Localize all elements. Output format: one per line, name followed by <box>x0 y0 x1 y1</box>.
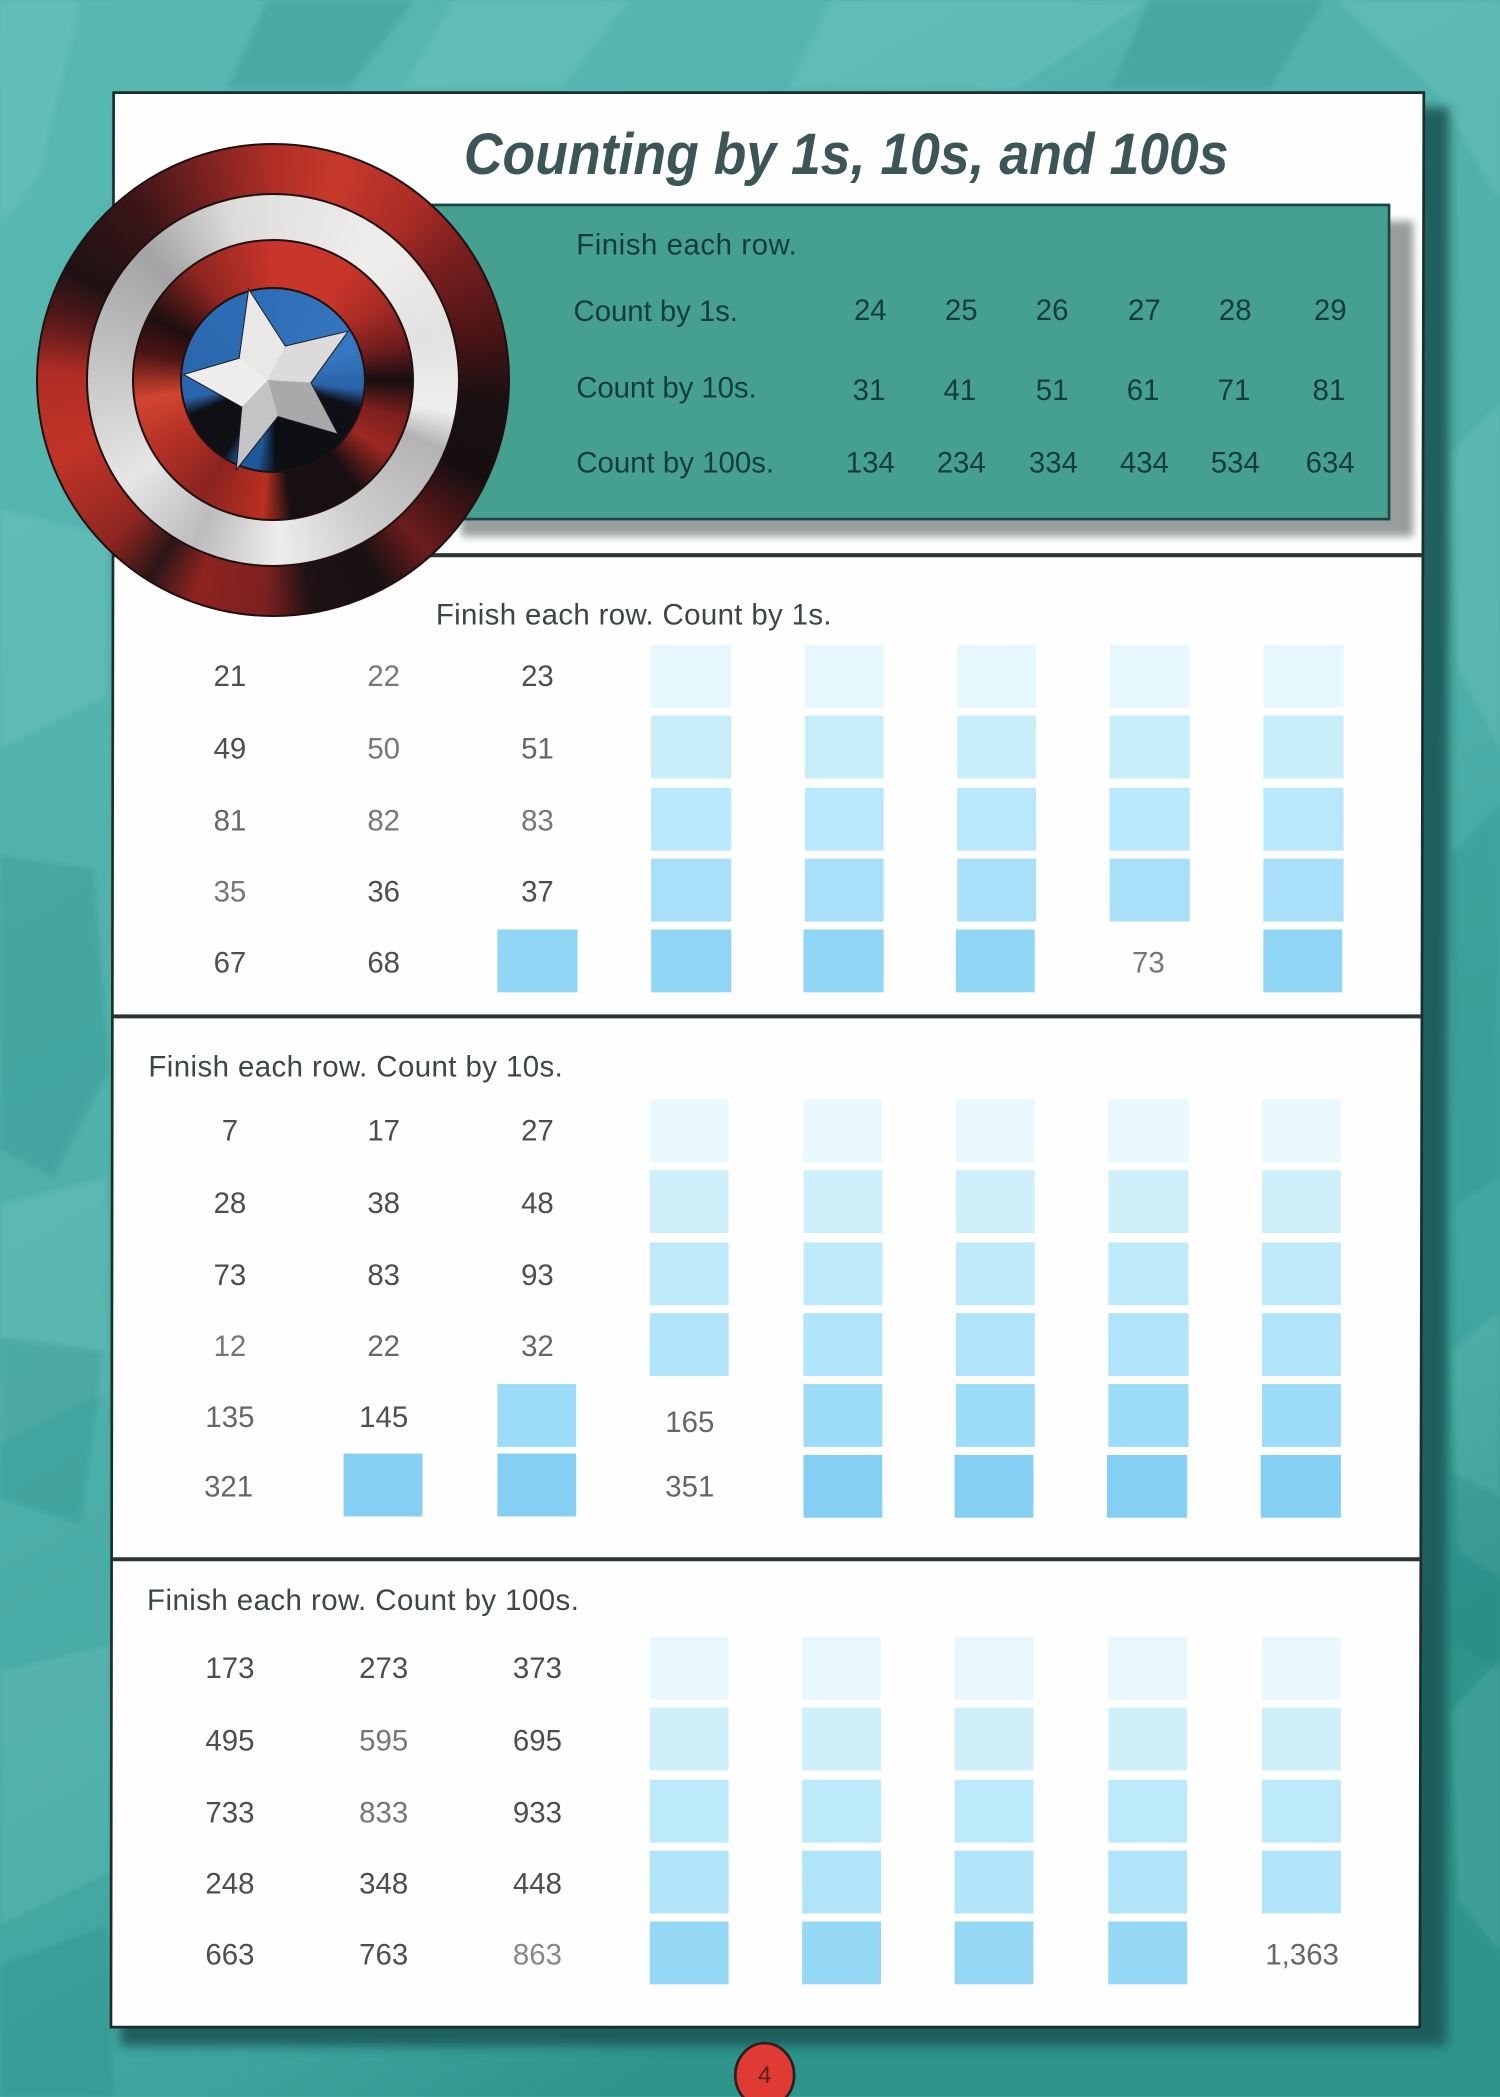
row: count by 10s: 51 <box>1036 374 1068 407</box>
example panel shadow <box>461 221 1413 536</box>
page number badge: 4 <box>758 2062 771 2089</box>
given numbers: 273 <box>359 1652 408 1685</box>
given numbers: 48 <box>521 1187 554 1220</box>
panel: worked examples <box>428 205 1389 519</box>
instruction: Finish each row. <box>576 228 797 261</box>
row: count by 10s <box>576 371 1345 407</box>
row: count by 100s: 334 <box>1029 446 1078 479</box>
row: count by 1s: Count by 1s. <box>574 295 738 328</box>
row: count by 1s: 25 <box>945 294 978 327</box>
given numbers: 145 <box>359 1401 408 1434</box>
given numbers: 7 <box>222 1115 238 1148</box>
given numbers: 82 <box>367 805 400 838</box>
row: count by 10s: 61 <box>1127 374 1159 407</box>
row: count by 100s: 234 <box>937 446 986 479</box>
given numbers: 595 <box>359 1724 408 1757</box>
given numbers: 348 <box>359 1867 408 1900</box>
given numbers: 448 <box>513 1867 562 1900</box>
given numbers: 165 <box>665 1406 714 1439</box>
page number badge <box>735 2043 794 2097</box>
row: count by 10s: 81 <box>1313 374 1345 407</box>
section: count by 1s <box>214 599 1344 992</box>
section divider lines <box>112 555 1422 1559</box>
given numbers: 27 <box>521 1115 554 1148</box>
given numbers <box>205 1652 1339 1971</box>
given numbers: 50 <box>367 732 400 765</box>
given numbers: 21 <box>214 660 246 693</box>
given numbers: 733 <box>205 1797 254 1830</box>
given numbers: 81 <box>214 805 246 838</box>
row: count by 1s: 29 <box>1314 294 1347 327</box>
row: count by 1s: 24 <box>854 294 887 327</box>
title: Counting by 1s, 10s, and 100s <box>464 122 1229 187</box>
given numbers: 22 <box>367 1330 400 1363</box>
given numbers: 933 <box>513 1797 562 1830</box>
row: count by 100s <box>576 446 1355 479</box>
given numbers: 67 <box>214 946 246 979</box>
row: count by 100s: 434 <box>1120 446 1169 479</box>
given numbers: 1,363 <box>1265 1938 1339 1971</box>
given numbers: 49 <box>214 732 246 765</box>
given numbers: 28 <box>214 1187 246 1220</box>
row: count by 100s: 634 <box>1306 446 1355 479</box>
given numbers: 38 <box>367 1187 400 1220</box>
given numbers: 22 <box>367 660 400 693</box>
given numbers: 663 <box>205 1938 254 1971</box>
given numbers: 35 <box>214 875 246 908</box>
given numbers: 23 <box>521 660 554 693</box>
given numbers: 695 <box>513 1724 562 1757</box>
given numbers: 495 <box>205 1724 254 1757</box>
given numbers: 17 <box>367 1115 400 1148</box>
row: count by 1s: 28 <box>1219 294 1252 327</box>
section: count by 10s <box>148 1051 1341 1518</box>
given numbers: 37 <box>521 875 554 908</box>
given numbers: 248 <box>205 1867 254 1900</box>
given numbers: 12 <box>214 1330 246 1363</box>
given numbers: 83 <box>367 1259 400 1292</box>
section: count by 100s <box>147 1584 1341 1984</box>
row: count by 100s: Count by 100s. <box>576 446 774 479</box>
given numbers: 51 <box>521 732 554 765</box>
given numbers: 68 <box>367 946 400 979</box>
given numbers <box>214 660 1165 979</box>
heading: Finish each row. Count by 1s. <box>436 599 832 632</box>
row: count by 100s: 134 <box>846 446 895 479</box>
heading: Finish each row. Count by 100s. <box>147 1584 579 1617</box>
given numbers: 833 <box>359 1797 408 1830</box>
given numbers: 351 <box>665 1470 714 1503</box>
given numbers: 173 <box>205 1652 254 1685</box>
given numbers: 135 <box>205 1401 254 1434</box>
row: count by 1s: 26 <box>1036 294 1068 327</box>
answer boxes <box>650 1637 1341 1984</box>
given numbers: 863 <box>513 1938 562 1971</box>
row: count by 1s <box>574 294 1347 328</box>
given numbers: 73 <box>214 1259 246 1292</box>
given numbers: 93 <box>521 1259 554 1292</box>
row: count by 1s: 27 <box>1128 294 1161 327</box>
given numbers <box>204 1115 714 1503</box>
row: count by 10s: 71 <box>1218 374 1250 407</box>
given numbers: 83 <box>521 805 554 838</box>
given numbers: 36 <box>367 875 400 908</box>
row: count by 10s: Count by 10s. <box>576 371 757 404</box>
row: count by 100s: 534 <box>1211 446 1260 479</box>
heading: Finish each row. Count by 10s. <box>148 1051 563 1084</box>
row: count by 10s: 41 <box>944 374 976 407</box>
given numbers: 321 <box>204 1470 253 1503</box>
given numbers: 73 <box>1132 946 1165 979</box>
icon: Captain America shield <box>36 143 510 617</box>
given numbers: 373 <box>513 1652 562 1685</box>
answer boxes <box>344 1099 1341 1518</box>
answer boxes <box>497 645 1344 992</box>
given numbers: 763 <box>359 1938 408 1971</box>
given numbers: 32 <box>521 1330 554 1363</box>
row: count by 10s: 31 <box>853 374 885 407</box>
